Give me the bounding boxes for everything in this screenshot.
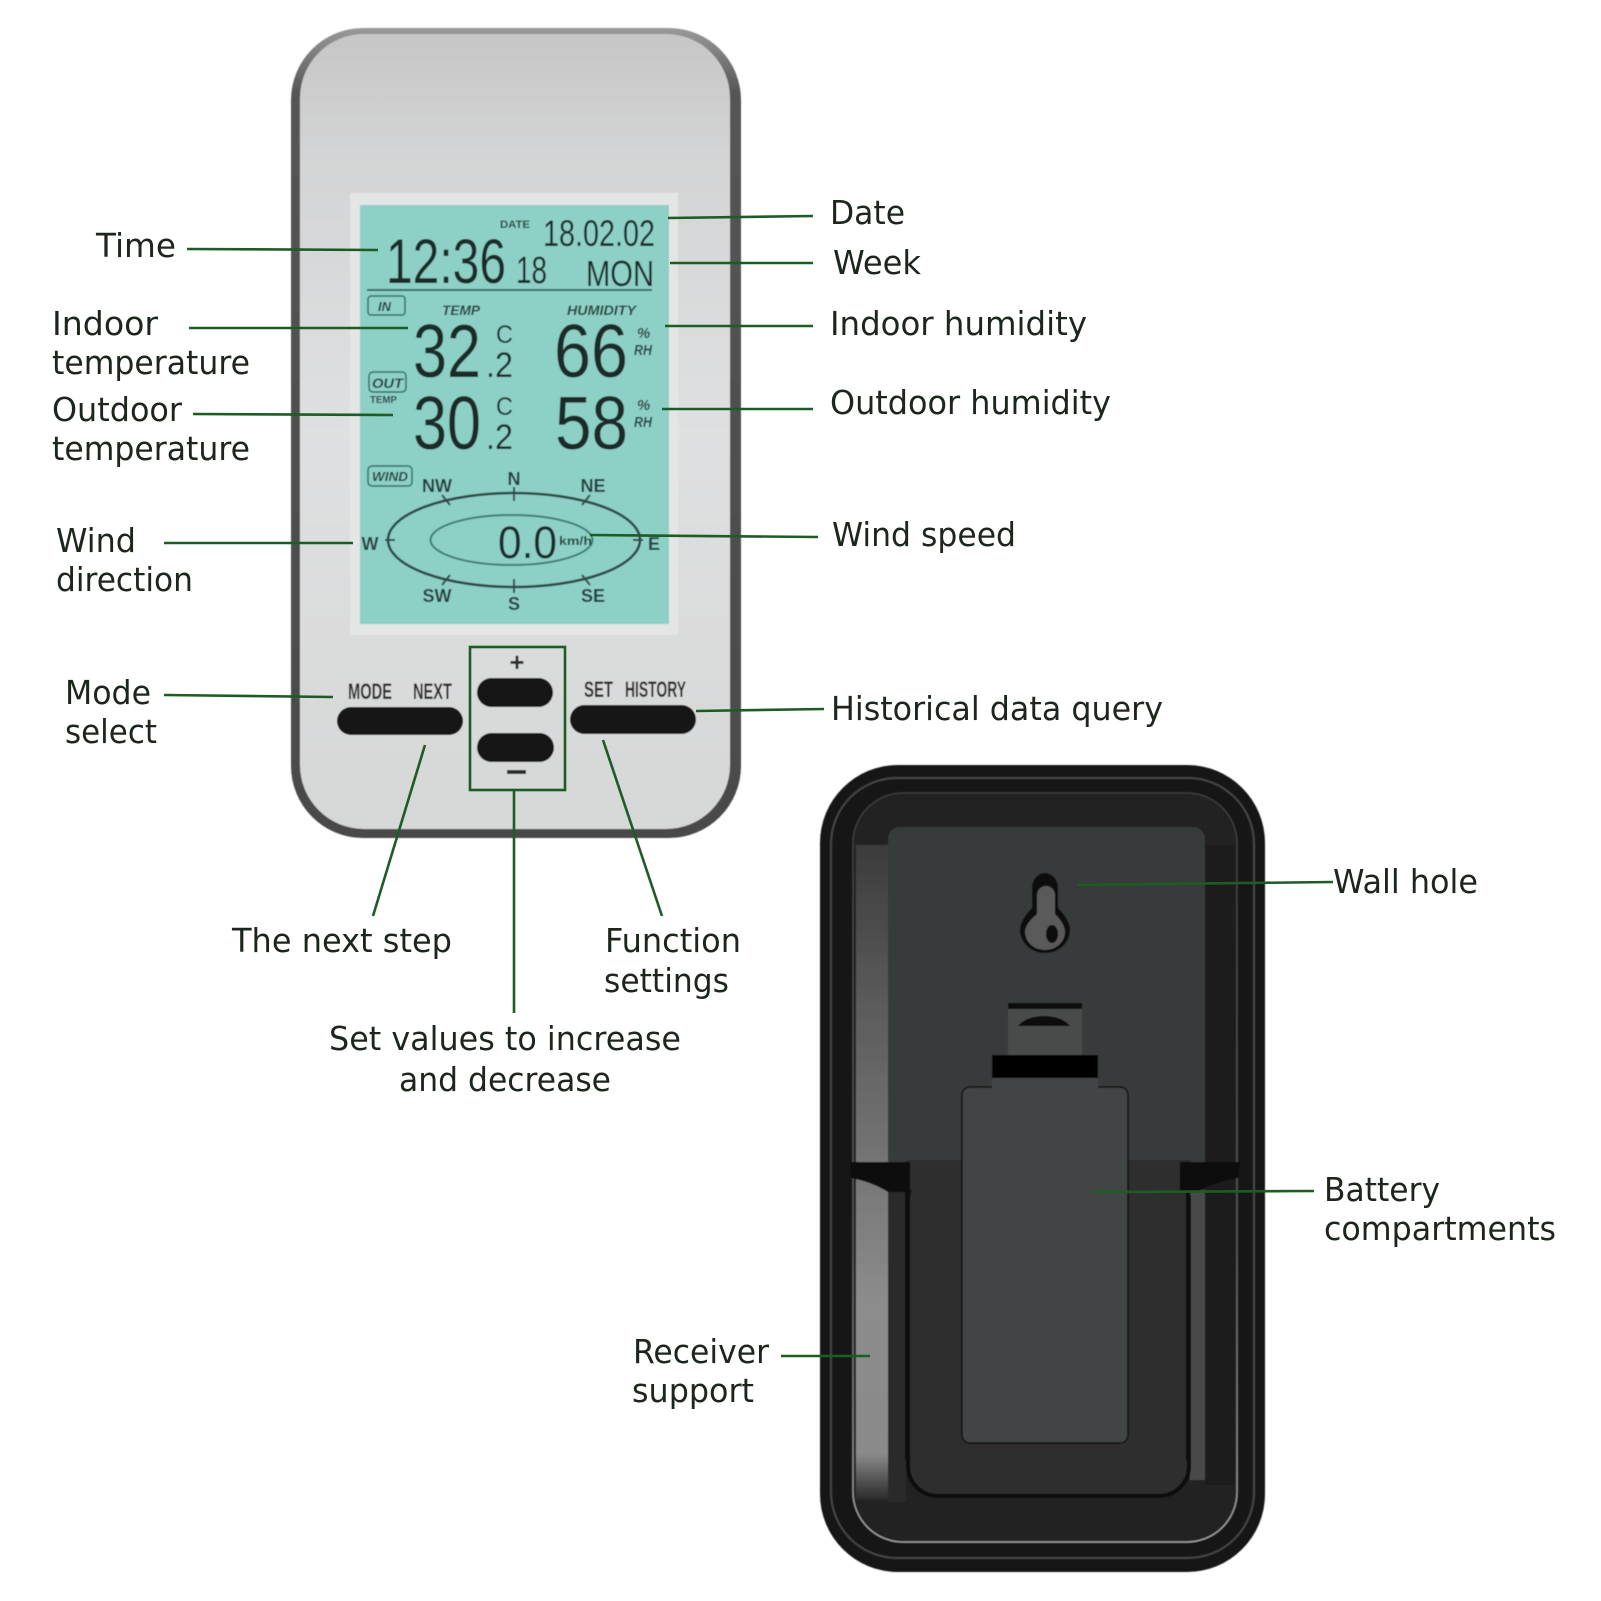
wind tag: WIND bbox=[372, 469, 409, 484]
label: Wind direction: Wind bbox=[56, 521, 136, 560]
time value: 12:36 bbox=[386, 227, 506, 297]
device body bbox=[291, 28, 741, 838]
panel: front of receiver bbox=[291, 28, 741, 838]
outdoor temperature value: 30 bbox=[413, 381, 481, 465]
wind compass: N bbox=[508, 469, 520, 489]
indoor temperature value: 32 bbox=[413, 309, 481, 393]
date value: 18.02.02 bbox=[543, 213, 655, 254]
label: Indoor temperature: Indoor bbox=[52, 304, 158, 343]
label: Function settings: Function bbox=[605, 921, 741, 960]
label: Battery compartments: compartments bbox=[1324, 1209, 1556, 1248]
buttons: NEXT bbox=[413, 679, 452, 704]
indoor temperature value: .2 bbox=[486, 346, 513, 385]
indoor tag bbox=[368, 296, 405, 315]
label: Outdoor humidity: Outdoor humidity bbox=[830, 383, 1111, 422]
label: Receiver support: Receiver bbox=[633, 1332, 769, 1371]
label: Battery compartments: Battery bbox=[1324, 1170, 1440, 1209]
wind compass bbox=[362, 469, 660, 614]
side slots bbox=[850, 1162, 1240, 1460]
label: Function settings bbox=[603, 740, 741, 1000]
label: Wall hole bbox=[1078, 862, 1478, 901]
buttons: + bbox=[509, 647, 525, 677]
wind compass: NW bbox=[422, 476, 452, 496]
indoor tag: IN bbox=[378, 299, 392, 314]
column headings: TEMP bbox=[442, 302, 481, 318]
label: Historical data query: Historical data query bbox=[831, 689, 1163, 728]
panel: back of receiver bbox=[820, 765, 1265, 1572]
label: Wall hole: Wall hole bbox=[1333, 862, 1478, 901]
time value: 18 bbox=[516, 250, 547, 292]
icon: keyhole wall hole bbox=[1020, 873, 1070, 953]
indoor humidity value: % bbox=[637, 325, 650, 342]
outdoor humidity value: 58 bbox=[555, 381, 628, 465]
indoor temperature value: C bbox=[496, 321, 513, 349]
clip bbox=[1008, 1003, 1082, 1055]
wind compass: SW bbox=[422, 586, 452, 606]
wind speed value: 0.0 bbox=[498, 517, 557, 568]
label: Outdoor temperature bbox=[52, 390, 393, 468]
outdoor temperature value: .2 bbox=[486, 418, 513, 457]
label: Receiver support bbox=[632, 1332, 870, 1410]
label: The next step: The next step bbox=[231, 921, 452, 960]
label: Wind speed: Wind speed bbox=[832, 515, 1016, 554]
wind compass: NE bbox=[580, 476, 606, 496]
column headings bbox=[442, 302, 638, 318]
label: Set values bbox=[329, 647, 681, 1099]
outdoor tag: OUT bbox=[372, 375, 405, 391]
outer shell bbox=[820, 765, 1265, 1572]
buttons: SET bbox=[584, 677, 613, 702]
label: Mode select bbox=[65, 673, 333, 751]
wind compass: SE bbox=[581, 586, 605, 606]
label: Function settings: settings bbox=[604, 961, 729, 1000]
wind tag bbox=[368, 466, 412, 486]
label: Indoor temperature bbox=[52, 304, 408, 382]
label: Mode select: Mode bbox=[65, 673, 151, 712]
inner panel bbox=[888, 827, 1205, 1502]
label: Time: Time bbox=[95, 226, 176, 265]
outdoor humidity value: % bbox=[637, 397, 650, 414]
wind compass: W bbox=[362, 534, 378, 554]
label: Outdoor temperature: temperature bbox=[52, 429, 250, 468]
battery cover bbox=[962, 1055, 1128, 1443]
wind compass: S bbox=[508, 594, 520, 614]
outdoor tag: TEMP bbox=[370, 395, 397, 406]
buttons: MODE bbox=[348, 679, 392, 704]
label: Receiver support: support bbox=[632, 1371, 754, 1410]
label: Wind direction: direction bbox=[56, 560, 193, 599]
label: Week: Week bbox=[833, 243, 922, 282]
label: The next step bbox=[231, 745, 452, 960]
column headings: HUMIDITY bbox=[567, 302, 638, 318]
label: Mode select: select bbox=[65, 712, 157, 751]
buttons: HISTORY bbox=[625, 677, 686, 702]
date value: DATE bbox=[500, 219, 530, 231]
label: Date: Date bbox=[830, 193, 905, 232]
buttons bbox=[337, 647, 696, 774]
label: Indoor humidity: Indoor humidity bbox=[830, 304, 1087, 343]
outdoor tag bbox=[369, 372, 406, 406]
label: Outdoor temperature: Outdoor bbox=[52, 390, 182, 429]
indoor humidity value: 66 bbox=[554, 309, 628, 393]
wind compass: E bbox=[648, 534, 660, 554]
label: Set values: Set values to increase bbox=[329, 1019, 681, 1058]
outdoor humidity value: RH bbox=[634, 414, 653, 431]
date value bbox=[500, 213, 655, 254]
label: Wind direction bbox=[56, 521, 353, 599]
wind speed value bbox=[498, 517, 592, 568]
outdoor temperature value: C bbox=[496, 393, 513, 421]
LCD screen bbox=[360, 205, 669, 624]
weekday value: MON bbox=[586, 253, 654, 294]
indoor humidity value: RH bbox=[634, 342, 653, 359]
label: Indoor temperature: temperature bbox=[52, 343, 250, 382]
wind speed value: km/h bbox=[559, 534, 592, 548]
label: Set values: and decrease bbox=[399, 1060, 611, 1099]
label: Battery compartments bbox=[1093, 1170, 1556, 1248]
